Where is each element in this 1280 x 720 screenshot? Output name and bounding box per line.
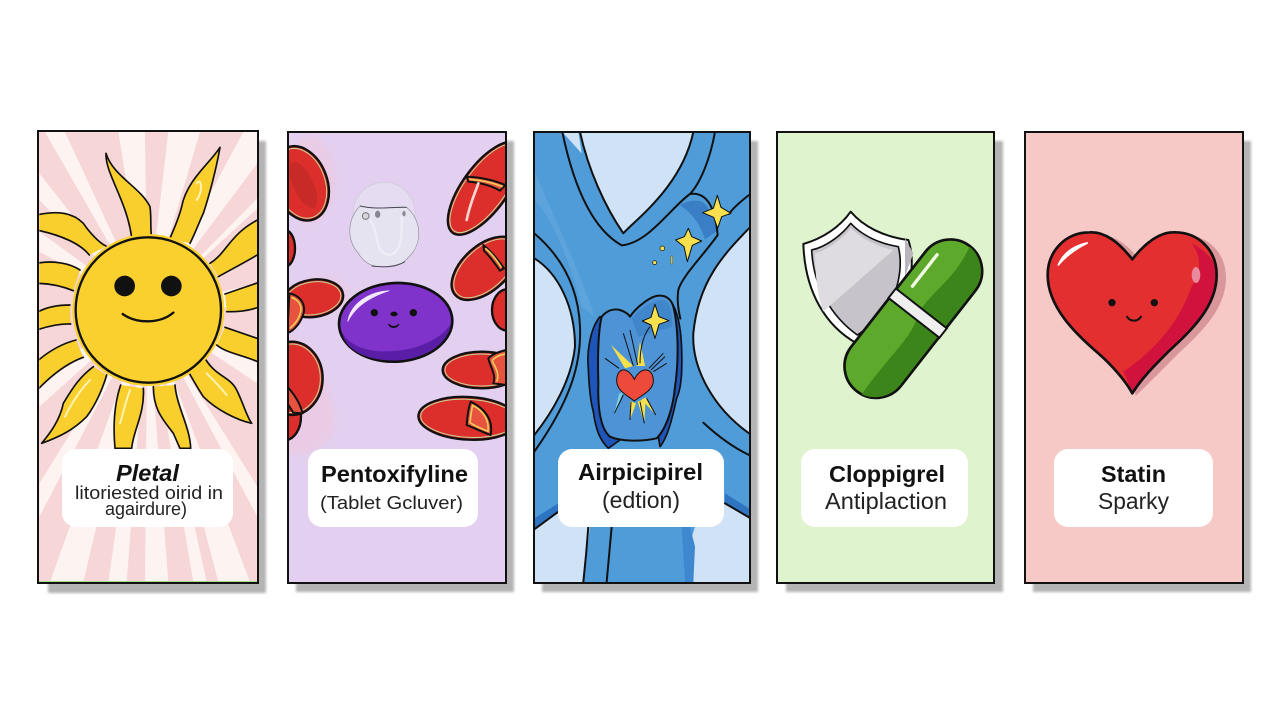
label: Airpicipirel: (edtion) <box>602 487 680 513</box>
panel: Airpicipirel <box>534 132 758 592</box>
label: Pentoxifyline: Pentoxifyline <box>321 461 468 487</box>
label: Cloppigrel <box>801 449 968 527</box>
icon: smiling heart <box>1048 232 1226 396</box>
blood vessel illustration <box>534 132 750 582</box>
red blood cells and purple tablet illustration <box>261 131 536 454</box>
label: Pentoxifyline: (Tablet Gcluver) <box>320 493 463 513</box>
panel: Pentoxifyline <box>287 131 516 594</box>
shield and capsule illustration <box>803 212 995 411</box>
label: Airpicipirel <box>558 449 724 527</box>
icon: clot with heart <box>588 296 682 448</box>
label: Statin: Statin <box>1101 461 1166 487</box>
label: Pletal: agairdure) <box>105 499 187 519</box>
panel: Cloppigrel <box>777 132 1003 592</box>
label: Airpicipirel: Airpicipirel <box>578 459 703 485</box>
label: Pletal: Pletal <box>116 460 180 486</box>
label: Cloppigrel: Cloppigrel <box>829 461 945 487</box>
panel: Statin <box>1025 132 1251 592</box>
label: Pletal <box>62 449 233 527</box>
label: Statin: Sparky <box>1098 488 1169 514</box>
infographic: five medication cards <box>37 130 1252 594</box>
icon: green capsule <box>831 226 995 411</box>
icon: sparkles <box>642 195 731 338</box>
label: Pletal: litoriested oirid in <box>75 483 223 503</box>
icon: transparent bubble <box>350 182 419 267</box>
icon: purple tablet character <box>337 280 454 365</box>
panel: Pletal <box>37 131 266 593</box>
sun illustration <box>37 132 260 582</box>
label: Cloppigrel: Antiplaction <box>825 488 947 514</box>
icon: shield <box>803 212 913 343</box>
label: Pentoxifyline <box>308 449 478 527</box>
label: Statin <box>1054 449 1213 527</box>
